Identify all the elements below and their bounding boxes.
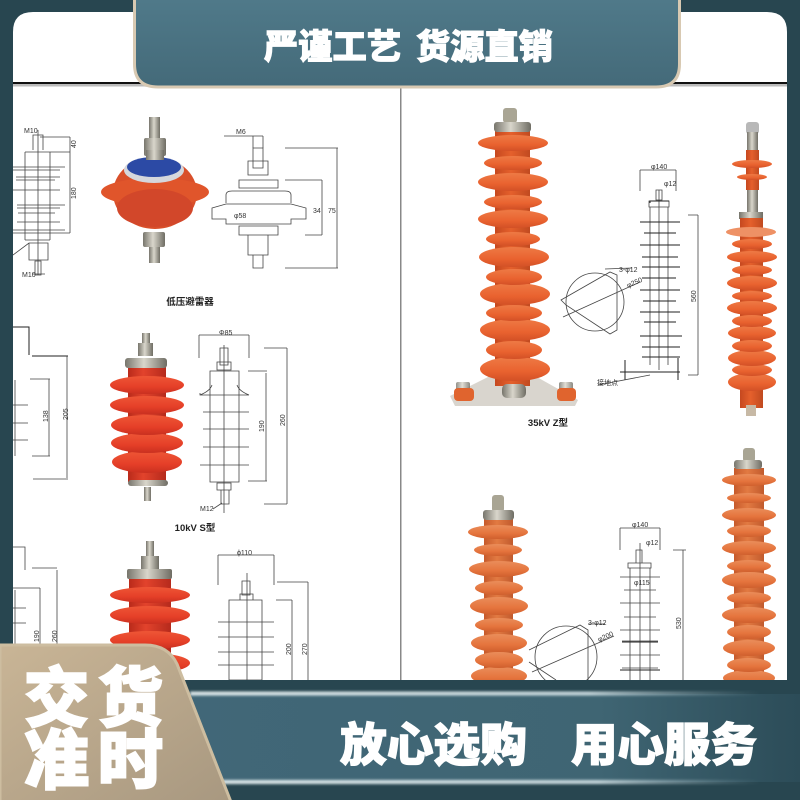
drawing: partial arrester with 190 and 260 dims: 260 bbox=[52, 630, 59, 642]
drawing: 35kV Z type dimensions: φ250 bbox=[626, 277, 644, 290]
caption: 10kV S type: 10kV S型 bbox=[175, 522, 216, 534]
drawing: partial arrester with 138 and 205 dims: 138 bbox=[43, 410, 50, 422]
product photo: 10kV S type arrester bbox=[110, 333, 184, 501]
drawing: low voltage arrester dimensions: 34 bbox=[313, 208, 321, 215]
drawing: 35kV Z type dimensions: φ12 bbox=[664, 181, 676, 188]
drawing: 10kV S type dimensions: Φ85 bbox=[219, 330, 232, 337]
drawing: lower centre dimensions: φ200 bbox=[597, 631, 615, 644]
header title: 严谨工艺 bbox=[264, 29, 401, 67]
header title: 货源直销 bbox=[416, 29, 553, 67]
drawing: partial M10 arrester: 40 bbox=[71, 140, 78, 148]
badge text: 准 bbox=[24, 724, 89, 797]
drawing: third arrester dimensions bbox=[218, 550, 309, 680]
badge text bbox=[24, 662, 163, 797]
footer slogan: 放心选购 bbox=[340, 719, 527, 771]
drawing: lower centre dimensions bbox=[529, 522, 686, 688]
caption: 35kV Z type: 35kV Z型 bbox=[528, 417, 569, 429]
drawing: lower centre dimensions: 3-φ12 bbox=[588, 620, 607, 627]
drawing: lower centre dimensions: φ115 bbox=[634, 580, 650, 587]
drawing: partial arrester with 190 and 260 dims bbox=[13, 547, 59, 650]
drawing: third arrester dimensions: 200 bbox=[286, 643, 293, 655]
drawing: partial arrester with 138 and 205 dims: 205 bbox=[63, 408, 70, 420]
drawing: 10kV S type dimensions bbox=[199, 330, 287, 513]
drawing: 10kV S type dimensions: 190 bbox=[259, 420, 266, 432]
drawing: lower centre dimensions: 530 bbox=[676, 617, 683, 629]
drawing: partial arrester with 190 and 260 dims: 190 bbox=[34, 630, 41, 642]
drawing: 35kV Z type dimensions: φ140 bbox=[651, 164, 667, 171]
drawing: partial M10 arrester: M10 bbox=[24, 128, 38, 135]
drawing: lower centre dimensions: φ12 bbox=[646, 540, 658, 547]
badge text: 货 bbox=[98, 662, 163, 735]
drawing: third arrester dimensions: ϕ110 bbox=[237, 550, 252, 557]
drawing: partial M10 arrester: M10 bbox=[22, 272, 36, 279]
product photo: 35kV Z type arrester bbox=[450, 108, 578, 406]
product photo: third red arrester bbox=[110, 541, 190, 680]
header banner bbox=[134, 0, 680, 87]
drawing: 10kV S type dimensions: 260 bbox=[280, 414, 287, 426]
product photo: lower centre arrester bbox=[468, 495, 529, 685]
drawing: partial M10 arrester: 180 bbox=[71, 187, 78, 199]
footer slogan bbox=[340, 719, 757, 771]
drawing: 35kV Z type dimensions bbox=[561, 164, 698, 387]
drawing: 35kV Z type dimensions: 560 bbox=[691, 290, 698, 302]
delivery badge bbox=[0, 645, 231, 800]
drawing: low voltage arrester dimensions: M6 bbox=[236, 129, 246, 136]
drawing: partial M10 arrester bbox=[13, 128, 78, 279]
drawing: 35kV Z type dimensions: 3-φ12 bbox=[619, 267, 638, 274]
drawing: partial arrester with 138 and 205 dims bbox=[13, 327, 70, 479]
badge text: 时 bbox=[98, 724, 163, 797]
footer slogan: 用心服务 bbox=[571, 719, 757, 771]
drawing: 10kV S type dimensions: M12 bbox=[200, 506, 214, 513]
caption: low voltage arrester: 低压避雷器 bbox=[166, 296, 214, 308]
drawing: third arrester dimensions: 270 bbox=[302, 643, 309, 655]
badge text: 交 bbox=[24, 662, 89, 735]
product photo: low voltage arrester bbox=[101, 117, 209, 263]
drawing: low voltage arrester dimensions: 75 bbox=[328, 208, 336, 215]
drawing: 35kV Z type dimensions: 接地点 bbox=[597, 378, 618, 387]
drawing: low voltage arrester dimensions: φ58 bbox=[234, 213, 246, 220]
drawing: low voltage arrester dimensions bbox=[212, 129, 338, 268]
product photo: lower right arrester bbox=[722, 448, 776, 686]
product photo: 35kV tall arrester with top tube bbox=[726, 122, 777, 416]
header title bbox=[264, 29, 553, 67]
drawing: lower centre dimensions: φ140 bbox=[632, 522, 648, 529]
footer band bbox=[0, 680, 800, 800]
